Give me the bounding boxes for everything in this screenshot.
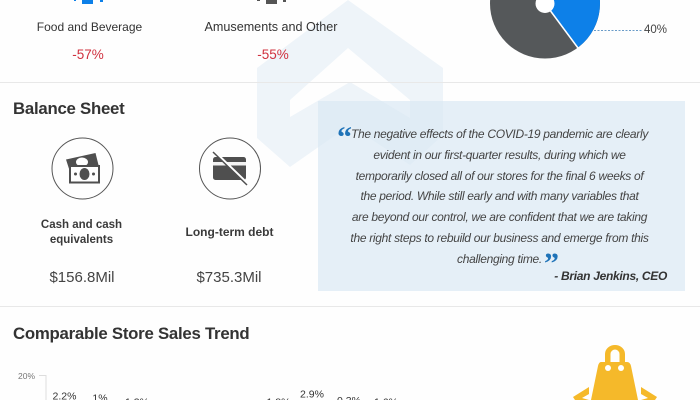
quote line 6: the right steps to rebuild our business and emerge from this xyxy=(350,231,649,245)
label: amusements and other: Amusements and Other xyxy=(204,20,338,34)
slice: blue 40% xyxy=(545,0,600,48)
leader line xyxy=(594,30,642,32)
data labels xyxy=(53,388,398,400)
quote text block xyxy=(337,121,668,283)
icon: amusements (cropped) xyxy=(257,0,286,4)
axis xyxy=(39,376,46,400)
heading: comparable store sales trend: Comparable Store Sales Trend xyxy=(13,324,249,343)
slice separator xyxy=(545,4,578,48)
divider xyxy=(0,82,700,83)
label: cash and cash equivalents xyxy=(41,219,122,246)
panel: CEO quote xyxy=(318,101,685,291)
icon: food and beverage (cropped) xyxy=(74,0,103,4)
label: cash and cash equivalents: equivalents xyxy=(50,234,113,246)
value: amusements and other: -55% xyxy=(257,47,289,62)
quote line 4: the period. While still early and with many variables that xyxy=(360,189,639,203)
label: cash and cash equivalents: Cash and cash xyxy=(41,219,122,231)
divider xyxy=(0,306,700,307)
y axis label: 20% xyxy=(18,371,35,381)
value: cash: $156.8Mil xyxy=(49,269,115,286)
chart: sales trend xyxy=(18,371,398,400)
quote attribution: - Brian Jenkins, CEO xyxy=(554,269,667,283)
heading: balance sheet: Balance Sheet xyxy=(13,99,124,118)
quote line 5: are beyond our control, we are confident that we are taking xyxy=(352,210,647,224)
pie chart xyxy=(490,0,642,58)
quote line 7: challenging time. xyxy=(457,252,542,266)
label: long-term debt: Long-term debt xyxy=(186,225,274,239)
icon: cash xyxy=(52,138,114,200)
quote line 3: temporarily closed all of our stores for the final 6 weeks of xyxy=(356,169,643,183)
quote line 2: evident in our first-quarter results, during which we xyxy=(373,148,626,162)
opening quote mark: “ xyxy=(337,121,352,154)
icon: credit card crossed xyxy=(199,138,261,200)
value: food and beverage: -57% xyxy=(72,47,104,62)
label: food and beverage: Food and Beverage xyxy=(37,20,142,34)
closing quote mark: ” xyxy=(544,247,559,280)
slice: grey 60% xyxy=(490,0,600,58)
icon: shopping bag xyxy=(573,345,657,400)
pie label: 40%: 40% xyxy=(644,24,667,36)
pie centre hole xyxy=(536,0,554,13)
quote line 1: The negative effects of the COVID-19 pandemic are clearly xyxy=(351,127,648,141)
value: debt: $735.3Mil xyxy=(196,269,262,286)
